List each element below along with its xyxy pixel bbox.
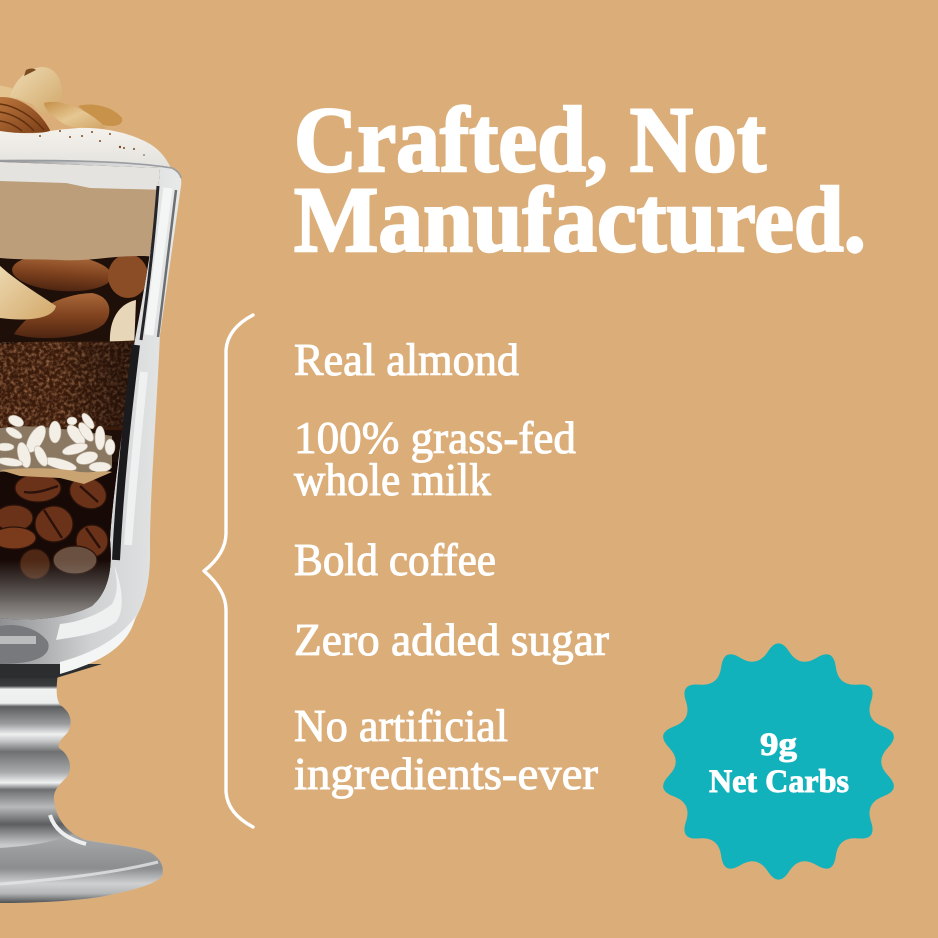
frosted almond slices at glass base — [0, 564, 110, 620]
heading: Manufactured. — [294, 169, 866, 272]
bracket — [204, 315, 253, 827]
item: grass-fed milk: 100% grass-fed — [294, 412, 576, 463]
toppings: almonds on foam — [0, 67, 122, 133]
image: layered glass of almond coffee — [0, 67, 181, 903]
coffee grounds layer — [0, 340, 140, 430]
whole almonds layer — [0, 256, 148, 344]
cinnamon specks — [39, 130, 145, 156]
badge: 9g net carbs — [663, 643, 894, 880]
heading — [294, 89, 866, 272]
item: bold coffee: Bold coffee — [294, 534, 496, 585]
item: no artificial ingredients: No artificial — [294, 700, 508, 751]
item: real almond: Real almond — [294, 334, 519, 385]
glass bowl, stem and foot — [0, 160, 181, 903]
foam dome — [0, 128, 171, 168]
glass wall highlights — [0, 160, 181, 640]
coffee beans layer — [0, 462, 130, 602]
item: no artificial ingredients — [294, 700, 598, 799]
contents visible through the glass — [0, 162, 160, 620]
ingredient list — [294, 334, 609, 799]
dark coffee layer — [0, 162, 160, 620]
rice layer — [0, 411, 115, 484]
item: grass-fed milk: whole milk — [294, 454, 491, 505]
item: grass-fed milk — [294, 412, 576, 505]
badge: 9g net carbs: 9g — [760, 727, 798, 763]
cream milk layer — [0, 160, 170, 260]
heading: Crafted, Not — [294, 89, 766, 192]
item: zero added sugar: Zero added sugar — [294, 614, 609, 665]
item: no artificial ingredients: ingredients-ever — [294, 748, 598, 799]
badge: 9g net carbs: Net Carbs — [709, 764, 849, 800]
